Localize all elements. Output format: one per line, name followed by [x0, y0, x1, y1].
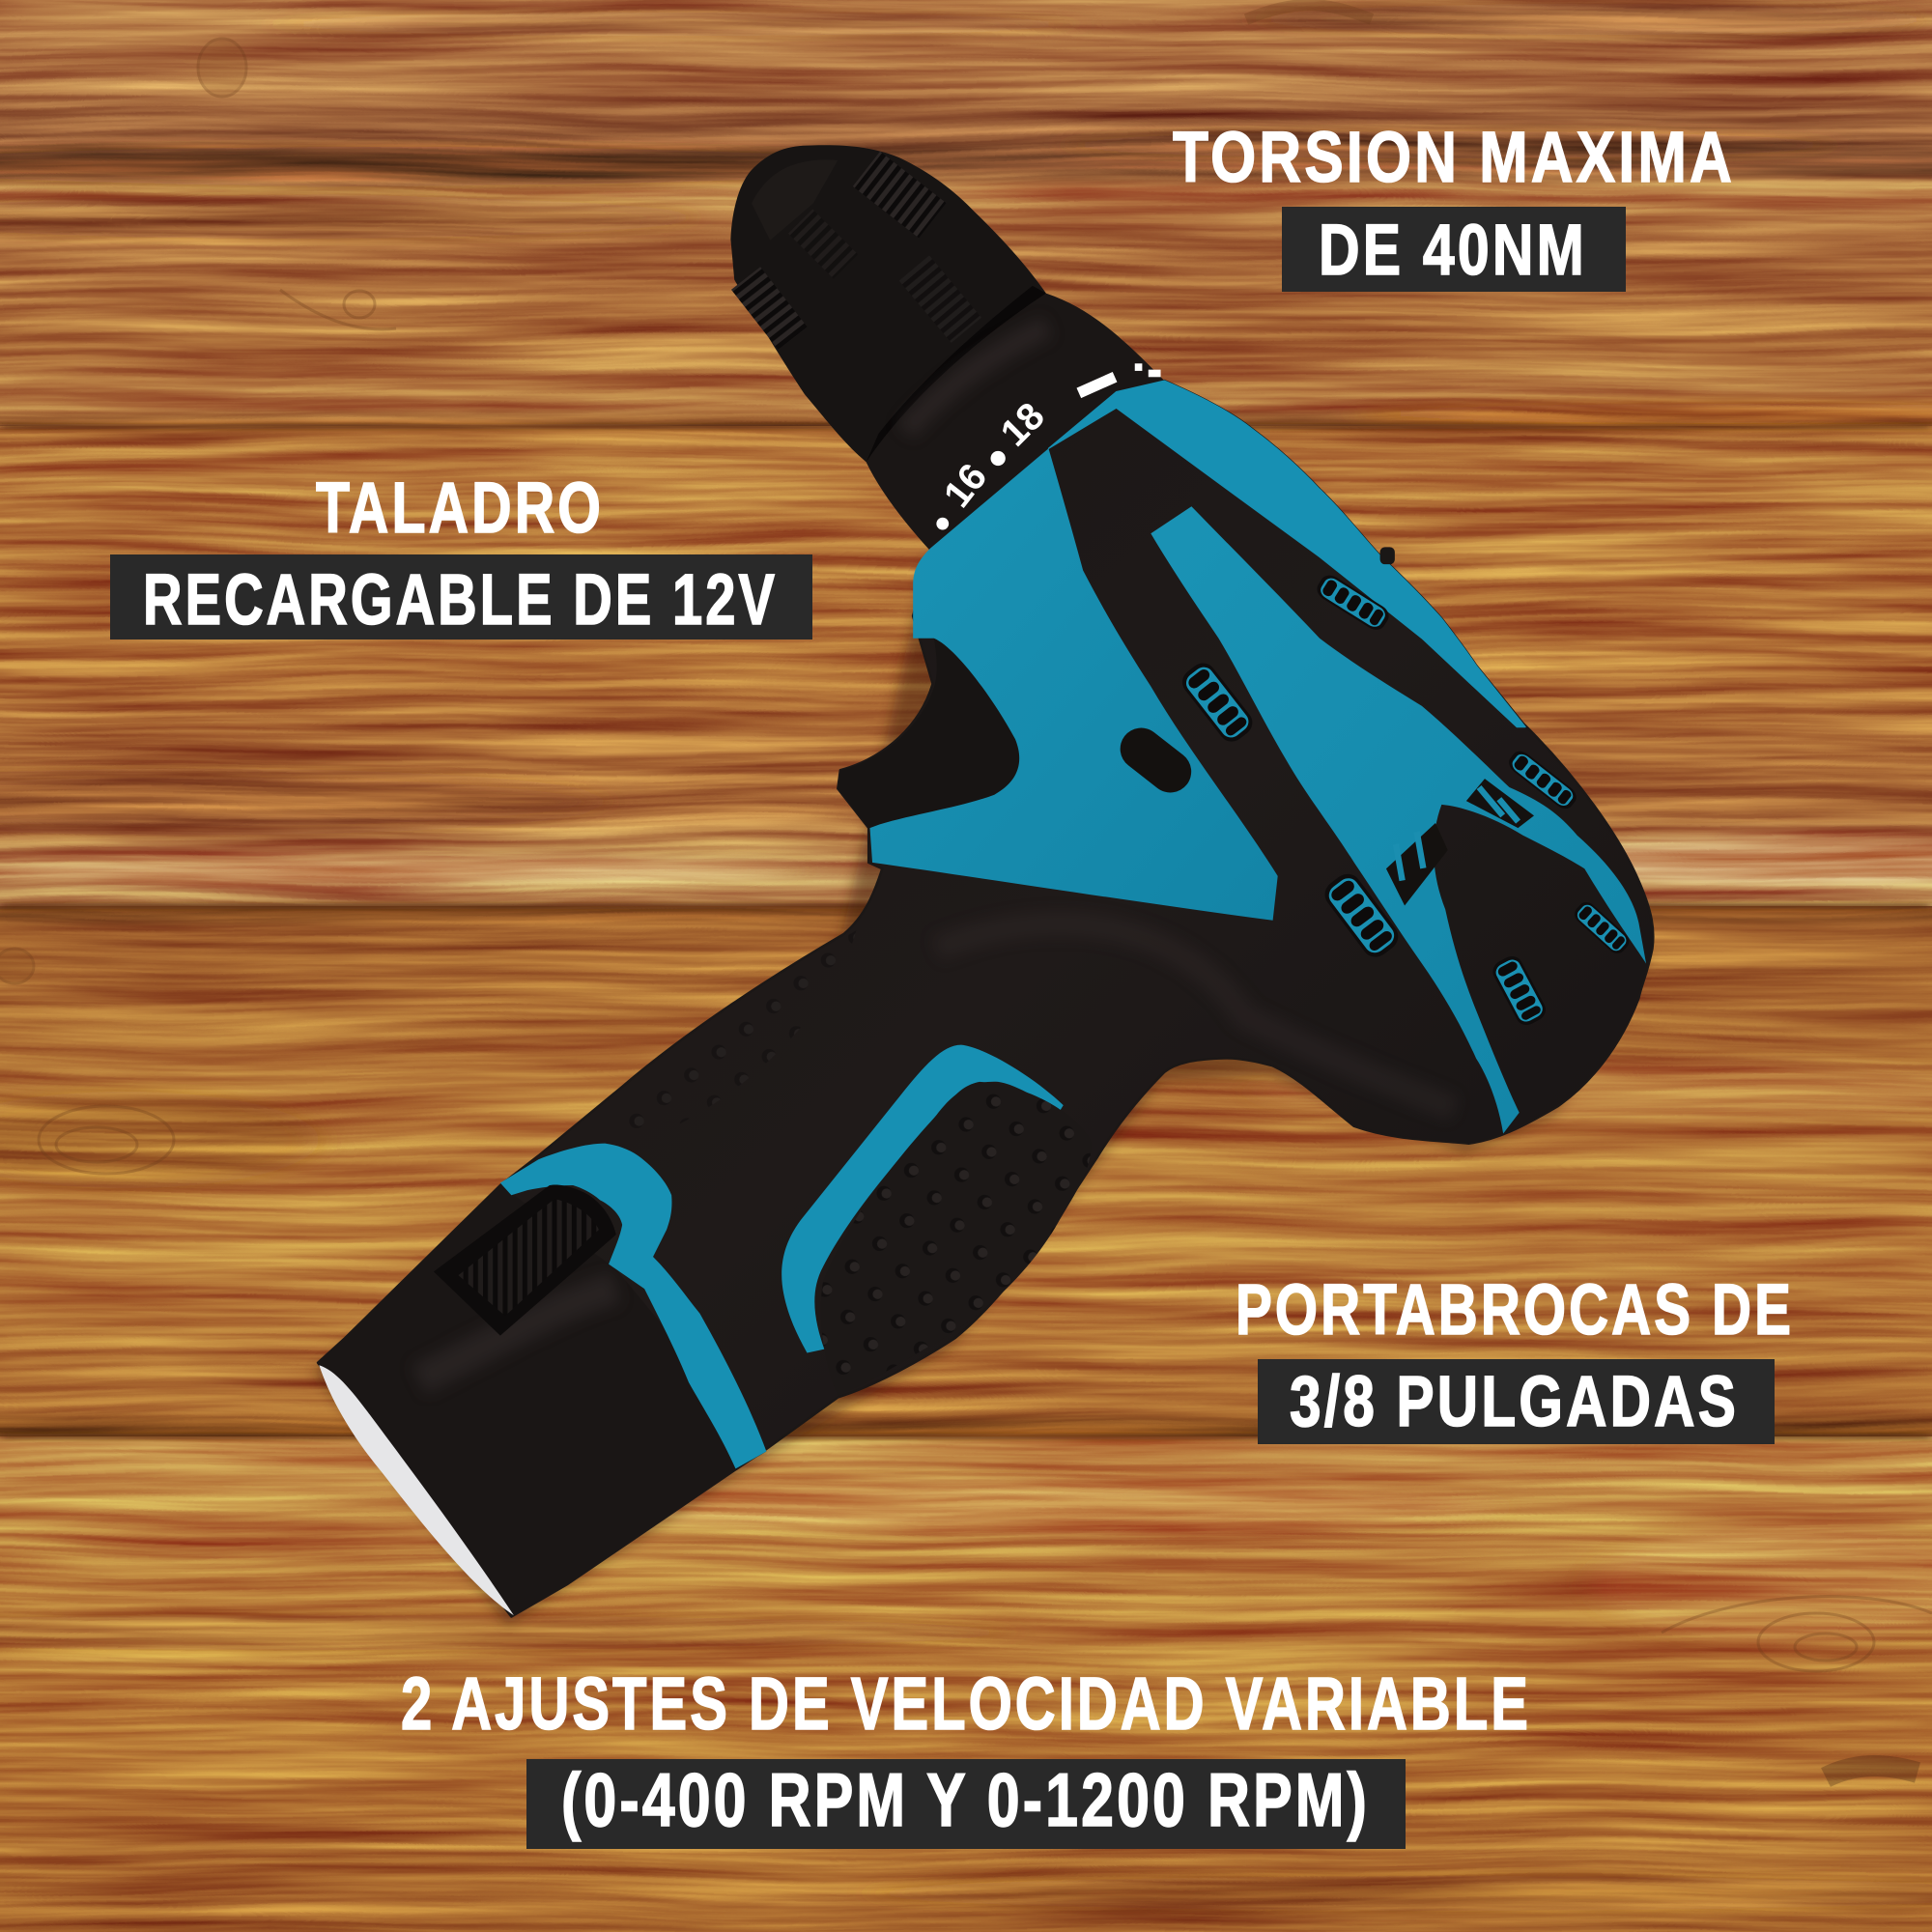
heading: TALADRO — [316, 468, 604, 548]
handle grip stripe — [781, 1045, 1064, 1353]
plank 2 — [0, 426, 1932, 906]
label: velocidad — [401, 1662, 1531, 1849]
value: 3/8 PULGADAS — [1290, 1361, 1739, 1441]
chuck ring — [867, 286, 1046, 462]
value bar — [110, 554, 812, 639]
chuck grip ribs — [731, 152, 981, 350]
value bar — [1282, 207, 1626, 292]
wood grain plank 2 — [0, 426, 1932, 906]
ventilation slots — [1178, 571, 1633, 1029]
value bar — [1258, 1359, 1775, 1444]
chuck lighter facet — [752, 159, 838, 241]
trigger — [838, 639, 1019, 828]
torque markings — [936, 363, 1161, 529]
battery blue band — [500, 1144, 766, 1468]
wood grain plank 1 — [0, 0, 1932, 426]
value bar — [526, 1759, 1406, 1849]
torque markings: 16 — [936, 456, 995, 516]
collar highlight — [905, 327, 1047, 431]
drill product photo — [314, 145, 1653, 1625]
value: (0-400 RPM Y 0-1200 RPM) — [561, 1757, 1370, 1842]
collar with torque scale — [867, 294, 1164, 551]
label: torsion maxima — [1173, 117, 1735, 292]
value: DE 40NM — [1319, 210, 1587, 290]
battery base plate — [319, 1365, 514, 1615]
value: RECARGABLE DE 12V — [143, 559, 778, 639]
upper handle texture — [604, 930, 856, 1134]
plank 3 — [0, 906, 1932, 1436]
battery highlight — [419, 1288, 616, 1380]
wood grain plank 3 — [0, 906, 1932, 1436]
handle grip with dots — [821, 1082, 1091, 1395]
battery pack — [318, 1144, 766, 1616]
label: taladro — [110, 468, 812, 639]
battery release clip — [434, 1184, 616, 1336]
wood grain plank 4 — [0, 1381, 1932, 1932]
plank 1 — [0, 0, 1932, 426]
top nub — [1380, 547, 1395, 564]
main body and handle — [318, 381, 1653, 1616]
heading: 2 AJUSTES DE VELOCIDAD VARIABLE — [401, 1662, 1531, 1746]
side switch button — [1112, 720, 1200, 801]
blue front shell — [870, 448, 1278, 921]
blue centre panel — [1151, 506, 1646, 1133]
body highlight — [936, 923, 1454, 1109]
drill shadow — [314, 389, 1649, 1625]
torque markings: 18 — [993, 394, 1053, 455]
label: portabrocas — [1236, 1269, 1794, 1444]
chuck — [730, 145, 1046, 462]
blue top shell — [1048, 381, 1525, 727]
rear vents — [1386, 779, 1534, 905]
plank seams — [0, 424, 1932, 1439]
plank 4 — [0, 1436, 1932, 1932]
heading: TORSION MAXIMA — [1173, 117, 1735, 197]
